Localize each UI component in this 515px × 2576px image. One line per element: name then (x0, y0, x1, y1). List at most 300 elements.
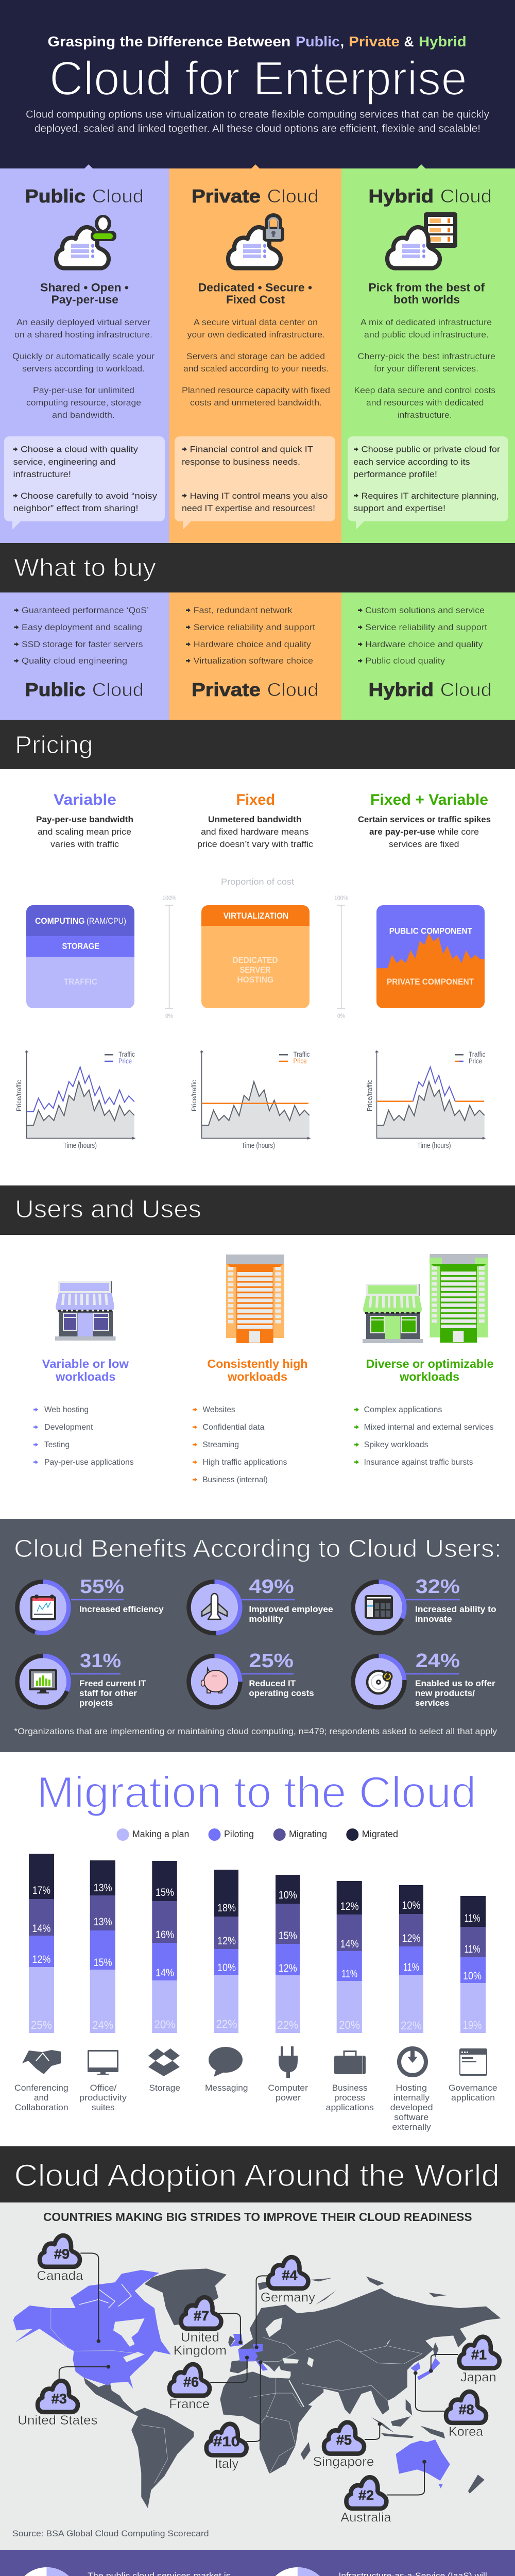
stacked bar chart (29, 1854, 486, 2033)
use case: diverse: Insurance against traffic bursts (364, 1458, 473, 1467)
stat: 32%: Increased ability to (415, 1604, 496, 1614)
pricing text: variable (36, 791, 133, 849)
stacked bar chart: 15% (94, 1957, 112, 1969)
stacked bar chart: 12% (217, 1935, 236, 1947)
marker: United Kingdom #7: #7 (194, 2308, 209, 2324)
pricing text: fixed: and fixed hardware means (201, 827, 309, 837)
panel: what to buy hybrid (341, 592, 515, 720)
icon: download (399, 2047, 426, 2075)
scale axes: 0% (165, 1012, 173, 1020)
line chart: variable pricing (15, 1050, 135, 1150)
pricing text: variable: Variable (54, 791, 116, 808)
labels: migration categories: power (276, 2093, 301, 2103)
pricing text: fixed + variable (358, 791, 491, 849)
pricing text: variable: Pay-per-use bandwidth (36, 815, 133, 824)
scale axes: 0% (337, 1012, 345, 1020)
heading: hybrid cloud: Hybrid (369, 185, 434, 207)
description: and scaled according to your needs. (183, 364, 329, 374)
marker: France #6: France (169, 2397, 210, 2412)
label (25, 679, 144, 700)
description (182, 317, 330, 408)
heading: hybrid cloud: Cloud (440, 185, 492, 207)
subtitle: Private (349, 33, 400, 49)
legend: Making a plan (132, 1829, 189, 1839)
stacked block: fixed: VIRTUALIZATION (224, 911, 288, 921)
stacked bar chart: 10% (463, 1970, 482, 1982)
stat: 55% (18, 1576, 164, 1633)
use case: variable: Testing (44, 1440, 70, 1449)
list: hybrid (358, 605, 487, 666)
map (13, 2268, 501, 2508)
marker: Canada #9 (37, 2235, 83, 2283)
description: Servers and storage can be added (186, 351, 325, 361)
use case: consistent (193, 1357, 308, 1484)
labels: migration categories: externally (392, 2122, 431, 2132)
description: A mix of dedicated infrastructure (360, 317, 492, 327)
stacked block: hybrid (376, 905, 485, 1010)
stacked block: fixed: HOSTING (237, 975, 273, 985)
marker: Singapore #5: Singapore (313, 2455, 374, 2469)
description: and bandwidth. (52, 410, 115, 420)
stacked bar chart: 20% (339, 2019, 360, 2031)
subheading: Pay-per-use (52, 293, 118, 306)
labels: migration categories: Business (332, 2083, 368, 2093)
callout: infrastructure! (13, 469, 71, 479)
marker: Singapore #5: #5 (336, 2432, 352, 2448)
stat: 32%: 32% (416, 1576, 460, 1598)
callout: Choose public or private cloud for (362, 445, 500, 454)
growth ring 1 (19, 2572, 74, 2576)
stat: 49% (188, 1576, 333, 1633)
use case: variable (33, 1357, 134, 1467)
stacked bar chart: 10% (279, 1889, 297, 1901)
stat: 24%: Enabled us to offer (415, 1679, 495, 1688)
stat: 55%: Increased efficiency (79, 1604, 164, 1614)
list: public: SSD storage for faster servers (22, 639, 143, 649)
subheading: Dedicated • Secure • (198, 281, 312, 294)
marker: Singapore #5 (313, 2422, 374, 2469)
pricing text: variable: and scaling mean price (38, 827, 131, 837)
labels: migration categories: software (394, 2112, 428, 2122)
chart caption: Proportion of cost (221, 877, 294, 887)
intro text (26, 109, 489, 134)
section band: what to buy (0, 543, 515, 592)
heading: private cloud (192, 185, 318, 207)
illustration: storefront and tower (363, 1254, 488, 1343)
connectors (59, 2253, 458, 2495)
description: costs and unmetered bandwidth. (190, 398, 322, 408)
legend: Piloting (224, 1829, 254, 1839)
marker: Italy #10: #10 (213, 2434, 240, 2449)
list: hybrid: Public cloud quality (365, 656, 445, 666)
subheading: Fixed Cost (226, 293, 285, 306)
stacked bar chart: 11% (403, 1961, 419, 1973)
description: on a shared hosting infrastructure. (14, 330, 152, 340)
label: Public (25, 679, 85, 700)
line chart: variable pricing: Price (118, 1057, 132, 1065)
stat: 31% (18, 1650, 146, 1708)
callout: performance profile! (353, 469, 437, 479)
stat: 24%: services (415, 1698, 449, 1708)
label: Cloud (267, 679, 318, 700)
list: public (14, 605, 149, 666)
description: and public cloud infrastructure. (364, 330, 489, 340)
description: your own dedicated infrastructure. (187, 330, 325, 340)
callout: Having IT control means you also (190, 491, 328, 501)
use case: consistent: Business (internal) (203, 1476, 268, 1484)
intro text: Cloud computing options use virtualization to create flexible computing services that can be quickly (26, 109, 489, 120)
marker: Canada #9: #9 (54, 2246, 70, 2262)
stat: 25%: 25% (249, 1650, 294, 1672)
subheading: both worlds (393, 293, 460, 306)
callout: Choose carefully to avoid “noisy (21, 491, 158, 501)
callout: need IT expertise and resources! (182, 503, 315, 513)
growth ring 2 (270, 2572, 325, 2576)
label (369, 679, 492, 700)
stacked bar chart: 11% (341, 1968, 357, 1980)
use case: diverse: Spikey workloads (364, 1440, 428, 1449)
stacked bar chart: 11% (465, 1943, 480, 1955)
list: public: Quality cloud engineering (22, 656, 127, 666)
panel: what to buy private (169, 592, 341, 720)
panel: cloud benefits (0, 1519, 515, 1752)
stacked bar chart: 19% (462, 2019, 482, 2031)
stacked bar chart: 22% (401, 2019, 422, 2032)
labels: migration categories: Conferencing (14, 2083, 68, 2093)
callout: support and expertise! (353, 503, 445, 513)
labels: migration categories: Computer (268, 2083, 308, 2093)
pricing text: fixed + variable: services are fixed (389, 839, 459, 849)
stat: 25% (188, 1650, 314, 1707)
labels: migration categories (14, 2083, 497, 2132)
stacked block: variable: STORAGE (62, 942, 99, 951)
legend: Migrating (289, 1829, 327, 1839)
labels: migration categories: Messaging (205, 2083, 248, 2093)
marker: Japan #1: Japan (460, 2370, 496, 2385)
stacked bar chart: 18% (217, 1902, 236, 1914)
marker: United States #3 (18, 2381, 97, 2428)
stat: 49%: Improved employee (249, 1604, 333, 1614)
marker: Korea #8: #8 (459, 2402, 474, 2417)
stacked bar chart: 25% (31, 2019, 52, 2031)
marker: Australia #2 (340, 2477, 391, 2524)
labels: migration categories: application (451, 2093, 495, 2103)
heading: private cloud: Cloud (267, 185, 318, 207)
stat: 32%: innovate (415, 1614, 452, 1624)
stat: 49%: 49% (249, 1576, 294, 1598)
use case: variable: Development (44, 1423, 93, 1432)
stacked block: fixed: DEDICATED (233, 956, 278, 965)
stacked bar chart: 10% (217, 1962, 236, 1974)
list: private: Hardware choice and quality (194, 639, 312, 649)
icon: speech bubble (209, 2047, 243, 2077)
legend: Migrated (362, 1829, 398, 1839)
marker: Japan #1 (459, 2337, 500, 2385)
labels: migration categories: Collaboration (15, 2103, 68, 2112)
label: Cloud (92, 679, 144, 700)
marker: Italy #10 (207, 2424, 247, 2471)
use case: consistent: workloads (227, 1370, 287, 1383)
line chart: fixed pricing: Time (hours) (242, 1141, 275, 1150)
labels: migration categories: internally (393, 2093, 430, 2103)
subtitle: , (340, 33, 344, 49)
icon: public cloud with user (56, 215, 116, 268)
panel: what to buy public (0, 592, 169, 720)
intro text: deployed, scaled and linked together. All these cloud options are efficient, flexible and scalable! (35, 123, 480, 134)
callout: response to business needs. (182, 457, 300, 467)
callout: Choose a cloud with quality (21, 445, 139, 454)
title: migration: Migration to the Cloud (37, 1768, 476, 1817)
pricing text: fixed + variable: Certain services or traffic spikes (358, 815, 491, 824)
stacked block: hybrid: PRIVATE COMPONENT (387, 977, 474, 987)
icon: plug (279, 2046, 298, 2078)
heading: hybrid cloud (369, 185, 492, 207)
stacked bar chart: 22% (216, 2018, 237, 2030)
callout: Financial control and quick IT (190, 445, 313, 454)
use case: consistent: Streaming (203, 1440, 239, 1449)
use case: variable: Web hosting (44, 1405, 89, 1414)
footnote: *Organizations that are implementing or maintaining cloud computing, n=479; respondents asked to select all that apply (14, 1726, 497, 1736)
stat: 31%: 31% (80, 1650, 121, 1672)
description: for your different services. (374, 364, 478, 374)
section band: what to buy: What to buy (14, 554, 156, 582)
scale axes: 100% (162, 894, 177, 902)
description: servers according to workload. (22, 364, 145, 374)
subtitle: Grasping the Difference Between (47, 33, 290, 49)
stat: 49%: mobility (249, 1614, 283, 1624)
line chart: hybrid pricing: Traffic (469, 1050, 485, 1058)
list: hybrid: Service reliability and support (365, 622, 487, 632)
stacked bar chart: 12% (402, 1933, 420, 1944)
stacked bar chart: 17% (32, 1885, 50, 1896)
marker: France #6 (169, 2364, 210, 2412)
labels: migration categories: productivity (79, 2093, 127, 2103)
legend (116, 1828, 398, 1841)
stacked bar chart: 16% (156, 1929, 174, 1941)
callout: service, engineering and (13, 457, 115, 467)
stat: 24% (353, 1650, 495, 1708)
stacked block: hybrid: PUBLIC COMPONENT (389, 927, 472, 936)
pricing text: variable: varies with traffic (50, 839, 119, 849)
icon: handshake (22, 2050, 61, 2074)
labels: migration categories: and (34, 2093, 48, 2103)
stacked bar chart: 14% (340, 1938, 359, 1950)
line chart: variable pricing: Price/traffic (15, 1080, 23, 1111)
illustration: tower (226, 1255, 284, 1343)
marker: United States #3: #3 (52, 2391, 67, 2406)
icon: storage box (148, 2048, 180, 2076)
description: Keep data secure and control costs (354, 385, 495, 395)
labels: migration categories: Hosting (396, 2083, 427, 2093)
line chart: variable pricing: Traffic (118, 1050, 135, 1058)
stat: 31%: projects (79, 1698, 113, 1708)
stacked bar chart: 10% (402, 1900, 420, 1911)
list: public: Easy deployment and scaling (22, 622, 142, 632)
panel: private cloud (169, 164, 341, 543)
section band: users and uses: Users and Uses (15, 1196, 201, 1223)
heading: Cloud Benefits According to Cloud Users: (14, 1535, 502, 1563)
stacked bar chart: 12% (279, 1962, 297, 1974)
use case: diverse: Complex applications (364, 1405, 442, 1414)
line chart: hybrid pricing: Price/traffic (366, 1080, 373, 1111)
heading: public cloud (25, 185, 144, 207)
label: Private (192, 679, 261, 700)
marker: Australia #2: Australia (340, 2510, 391, 2524)
description: A secure virtual data center on (194, 317, 318, 327)
callout: neighbor” effect from sharing! (13, 503, 138, 513)
stat: 31%: staff for other (79, 1688, 137, 1698)
use case: consistent: Confidential data (203, 1423, 264, 1432)
stacked bar chart: 13% (94, 1882, 112, 1894)
marker: Japan #1: #1 (471, 2347, 487, 2362)
icon: private cloud with lock (228, 216, 284, 268)
description: computing resource, storage (26, 398, 141, 408)
marker: Korea #8 (446, 2392, 486, 2439)
panel: world map (0, 2202, 515, 2550)
stacked block: variable: (RAM/CPU) (87, 917, 126, 926)
subtitle: Public (296, 33, 340, 49)
icon: monitor (88, 2050, 118, 2075)
heading: private cloud: Private (192, 185, 261, 207)
subheading (369, 281, 485, 306)
description (354, 317, 495, 420)
list: private (186, 605, 315, 666)
icon: hybrid cloud with server (387, 212, 457, 268)
section band: pricing: Pricing (15, 732, 93, 759)
list: hybrid: Hardware choice and quality (365, 639, 483, 649)
subheading: Pick from the best of (369, 281, 485, 294)
labels: migration categories: Office/ (90, 2083, 117, 2093)
label: Cloud (440, 679, 492, 700)
callout: Requires IT architecture planning, (362, 491, 499, 501)
marker: Italy #10: Italy (215, 2457, 238, 2471)
line chart: hybrid pricing (366, 1050, 486, 1150)
pricing text: fixed: Fixed (236, 791, 275, 808)
stacked bar chart: 14% (32, 1923, 50, 1935)
stat: 24%: 24% (416, 1650, 460, 1672)
stat: 24%: new products/ (415, 1688, 475, 1698)
marker: Korea #8: Korea (449, 2425, 483, 2439)
section band: cloud adoption: Cloud Adoption Around the World (14, 2158, 500, 2193)
stacked bar chart: 13% (94, 1916, 112, 1928)
description (12, 317, 154, 420)
marker: United Kingdom #7: United (181, 2330, 219, 2345)
section band: pricing (0, 720, 515, 769)
callout (348, 436, 508, 530)
description: Planned resource capacity with fixed (182, 385, 330, 395)
stacked block: variable (26, 905, 134, 1008)
stacked bar chart: 14% (156, 1967, 174, 1979)
labels: migration categories: applications (326, 2103, 374, 2112)
stacked bar chart: 15% (279, 1930, 297, 1942)
pricing text: fixed + variable: Fixed + Variable (370, 791, 488, 808)
use case: consistent: Websites (203, 1405, 235, 1414)
list: public: Guaranteed performance ‘QoS’ (22, 605, 149, 615)
icon: briefcase (334, 2052, 366, 2074)
line chart: hybrid pricing: Price (469, 1057, 482, 1065)
stacked bar chart: 15% (156, 1887, 174, 1899)
stacked bar chart: 12% (32, 1954, 50, 1965)
line chart: fixed pricing: Price (294, 1057, 307, 1065)
pricing text: fixed (197, 791, 314, 849)
source: Source: BSA Global Cloud Computing Scorecard (12, 2529, 209, 2538)
use case: variable: Variable or low (42, 1357, 129, 1370)
marker: United States #3: United States (18, 2413, 97, 2428)
use case: consistent: Consistently high (207, 1357, 308, 1370)
subheading: Shared • Open • (40, 281, 129, 294)
description: Quickly or automatically scale your (12, 351, 154, 361)
icon: application window (459, 2048, 487, 2076)
line chart: fixed pricing: Traffic (294, 1050, 310, 1058)
subtitle: & (404, 33, 414, 49)
use case: diverse: Mixed internal and external services (364, 1423, 493, 1432)
subtitle: Hybrid (419, 33, 467, 49)
marker: Germany #4: Germany (261, 2291, 316, 2305)
stat: 31%: Freed current IT (79, 1679, 146, 1688)
subheading (40, 281, 129, 306)
callout (175, 436, 335, 530)
labels: migration categories: developed (390, 2103, 433, 2112)
scale axes: 100% (334, 894, 348, 902)
section band: users and uses (0, 1185, 515, 1235)
marker: Australia #2: #2 (358, 2487, 374, 2503)
marker: Canada #9: Canada (37, 2269, 83, 2283)
subheading (198, 281, 312, 306)
illustration: storefront (55, 1281, 115, 1341)
description: Cherry-pick the best infrastructure (357, 351, 495, 361)
description: An easily deployed virtual server (16, 317, 150, 327)
line chart: fixed pricing (190, 1050, 311, 1150)
use case: variable: Pay-per-use applications (44, 1458, 134, 1467)
label: Hybrid (369, 679, 434, 700)
panel: growth stats (0, 2550, 515, 2576)
stacked bar chart: 12% (340, 1901, 359, 1912)
description: infrastructure. (398, 410, 452, 420)
stacked block: variable: TRAFFIC (64, 977, 97, 987)
header panel (0, 0, 515, 168)
subtitle (47, 33, 467, 49)
stacked bar chart: 20% (154, 2018, 175, 2031)
stat: 25%: operating costs (249, 1688, 314, 1698)
pricing text: fixed: price doesn’t vary with traffic (197, 839, 314, 849)
stacked bar chart: 24% (92, 2019, 113, 2031)
marker: United Kingdom #7: Kingdom (174, 2344, 227, 2358)
stat: 32% (353, 1576, 496, 1633)
list: private: Virtualization software choice (194, 656, 313, 666)
pricing text: fixed + variable: while core (437, 827, 479, 837)
callout: each service according to its (353, 457, 470, 467)
marker: Germany #4 (261, 2257, 316, 2305)
map heading: COUNTRIES MAKING BIG STRIDES TO IMPROVE THEIR CLOUD READINESS (43, 2210, 472, 2224)
line chart: variable pricing: Time (hours) (63, 1141, 97, 1150)
use case: diverse: workloads (399, 1370, 459, 1383)
stacked bar chart: 11% (465, 1912, 480, 1924)
use case: diverse (354, 1357, 493, 1467)
icon row: migration categories (22, 2046, 487, 2078)
stacked bar chart: 22% (277, 2019, 298, 2031)
labels: migration categories: Governance (449, 2083, 497, 2093)
label (192, 679, 318, 700)
title: Cloud for Enterprise (49, 52, 467, 105)
list: hybrid: Custom solutions and service (365, 605, 485, 615)
marker: United Kingdom #7 (174, 2297, 227, 2358)
description: and resources with dedicated (366, 398, 484, 408)
labels: migration categories: Storage (149, 2083, 180, 2093)
list: private: Service reliability and support (194, 622, 315, 632)
list: private: Fast, redundant network (194, 605, 293, 615)
stat: 25%: Reduced IT (249, 1679, 296, 1688)
callout (4, 436, 165, 530)
